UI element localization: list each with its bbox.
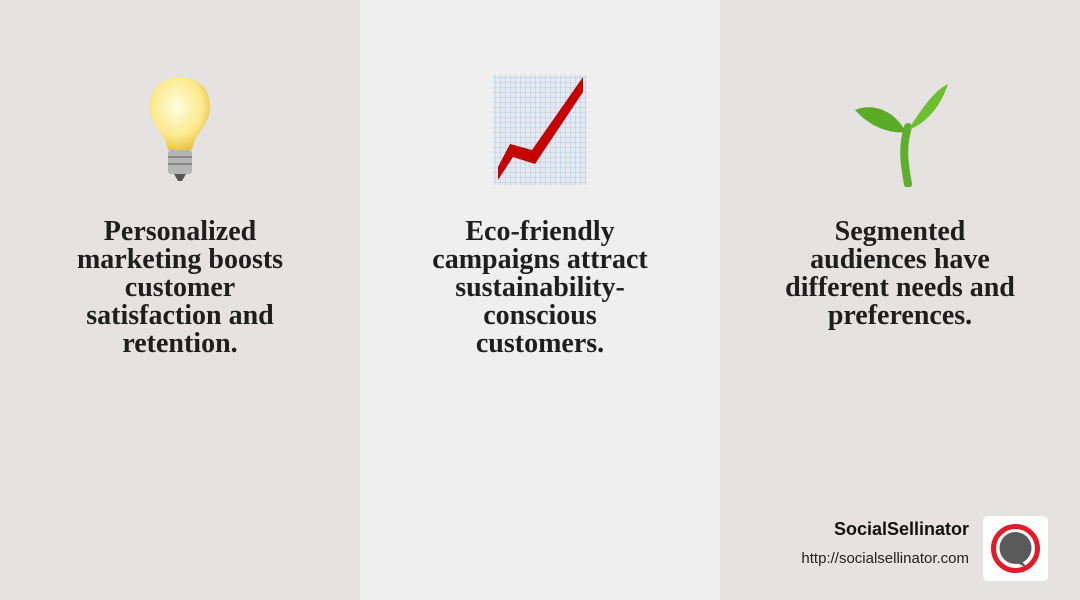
icon: chart [493,75,587,185]
heading: eco-friendly: Eco-friendly campaigns attract sustainability-conscious customers. [432,216,648,359]
icon: light bulb [150,77,210,181]
panel: left [0,0,360,600]
icon: sprout [855,84,948,187]
brand text: http://socialsellinator.com [801,550,969,567]
panel: right [720,0,1080,600]
logo [983,516,1048,581]
heading: segmented audiences: Segmented audiences have different needs and preferences. [785,216,1015,331]
brand text [801,519,969,567]
panel: middle [360,0,720,600]
heading: personalized marketing: Personalized marketing boosts customer satisfaction and retention. [77,216,283,359]
brand text: SocialSellinator [834,519,969,539]
